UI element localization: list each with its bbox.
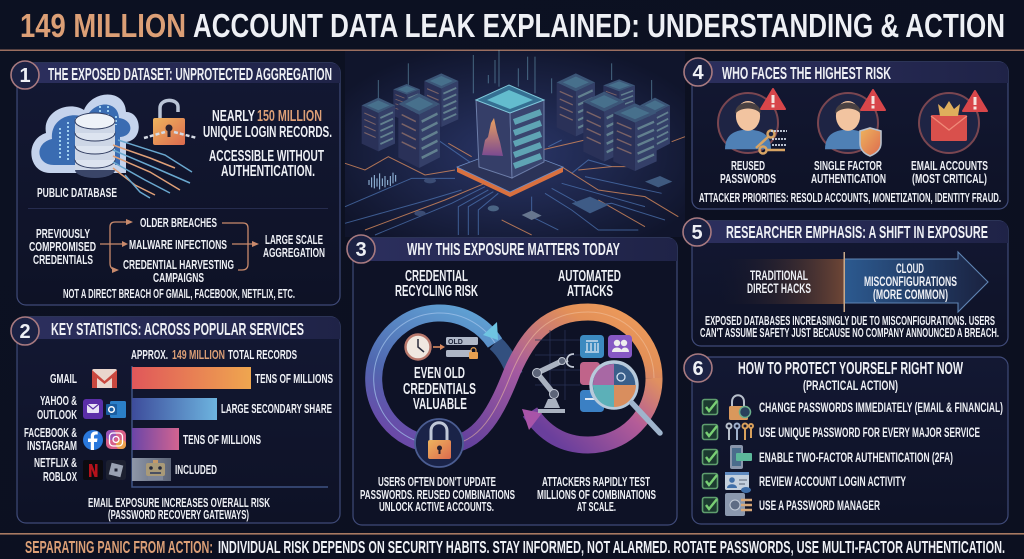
diagram: shift arrow: DIRECT HACKS (747, 281, 811, 296)
number badge 4 (684, 58, 712, 86)
note: misconfigurations (700, 314, 999, 340)
flow: credentials to aggregation: CREDENTIALS (33, 252, 93, 267)
text: attackers test at scale (537, 474, 656, 514)
diagram: shift arrow: MISCONFIGURATIONS (864, 274, 957, 289)
number badge 6 (684, 354, 712, 382)
panel 1: the exposed dataset (11, 61, 340, 305)
text: reused combinations (360, 474, 515, 514)
icon: robot arm and app tiles (532, 330, 660, 433)
flow: credentials to aggregation: LARGE SCALE (265, 232, 323, 247)
title: 149 MILLION (20, 7, 186, 44)
flow: credentials to aggregation: CREDENTIAL HARVESTING (123, 257, 234, 272)
bar chart: TENS OF MILLIONS (183, 432, 261, 447)
footer banner (0, 533, 1024, 557)
flow: credentials to aggregation: AGGREGATION (263, 245, 325, 260)
text: reused combinations: USERS OFTEN DON'T UPDATE (378, 474, 496, 489)
text: even old credentials valuable: CREDENTIALS (403, 381, 476, 398)
subheading: credential recycling: CREDENTIAL (405, 268, 468, 285)
service labels: ROBLOX (43, 469, 77, 484)
chart caption: 149 MILLION (172, 347, 225, 362)
text: even old credentials valuable: EVEN OLD (414, 365, 465, 382)
service labels: GMAIL (50, 371, 77, 386)
flow: credentials to aggregation: MALWARE INFECTIONS (129, 237, 227, 252)
illustration: server farm (345, 50, 685, 237)
labels: risk groups: PASSWORDS (720, 171, 776, 186)
diagram: shift arrow: (MORE COMMON) (873, 287, 948, 302)
panel 4 heading: WHO FACES THE HIGHEST RISK (722, 63, 891, 83)
action: password manager: USE A PASSWORD MANAGER (759, 498, 880, 513)
panel 6 heading: (PRACTICAL ACTION) (803, 378, 898, 393)
subheading: automated attacks: AUTOMATED (558, 268, 621, 285)
action: review login activity (702, 472, 906, 493)
service labels (24, 371, 77, 484)
labels: risk groups: AUTHENTICATION (811, 171, 886, 186)
callout: record count: ACCESSIBLE WITHOUT (209, 148, 324, 165)
panel 3: why this exposure matters (347, 235, 677, 525)
number badge 2 (11, 317, 39, 345)
labels: risk groups: (MOST CRITICAL) (912, 171, 987, 186)
number badge 1: 1 (19, 65, 31, 87)
flow: credentials to aggregation: CAMPAIGNS (153, 270, 204, 285)
labels: risk groups (720, 158, 988, 186)
text: even old credentials valuable: VALUABLE (413, 396, 467, 413)
number badge 6: 6 (692, 358, 704, 380)
icon: reused passwords (718, 89, 787, 154)
icon: robot (146, 460, 165, 480)
icon: facebook (83, 430, 103, 450)
icon: roblox (106, 460, 126, 480)
panel 1 heading: THE EXPOSED DATASET: UNPROTECTED AGGREGATION (48, 64, 332, 84)
panel 2: key statistics (11, 317, 340, 523)
bar chart: LARGE SECONDARY SHARE (221, 401, 332, 416)
panel 6 heading (738, 358, 963, 393)
subheading: automated attacks: ATTACKS (567, 283, 613, 300)
callout: record count: UNIQUE LOGIN RECORDS. (203, 124, 332, 141)
number badge 1 (11, 61, 39, 89)
note: email exposure: (PASSWORD RECOVERY GATEWAYS) (108, 507, 249, 522)
number badge 3 (347, 235, 375, 263)
number badge 5: 5 (691, 222, 703, 244)
flow: credentials to aggregation: PREVIOUSLY (36, 226, 90, 241)
panel 2 header (17, 317, 340, 339)
text: attackers test at scale: AT SCALE. (577, 499, 616, 514)
text: reused combinations: PASSWORDS. REUSED COMBINATIONS (360, 487, 515, 502)
diagram: infinity loop (374, 312, 654, 445)
number badge 2: 2 (19, 321, 31, 343)
action: review login activity: REVIEW ACCOUNT LOGIN ACTIVITY (759, 474, 906, 489)
subheading: automated attacks (558, 268, 621, 300)
subheading: credential recycling (395, 268, 478, 300)
panel 2 heading: KEY STATISTICS: ACROSS POPULAR SERVICES (51, 319, 304, 339)
flow: credentials to aggregation: OLDER BREACHES (140, 215, 217, 230)
panel 5: researcher emphasis (683, 218, 1008, 346)
flow: credentials to aggregation: COMPROMISED (29, 239, 96, 254)
bar chart (132, 366, 333, 487)
diagram: shift arrow: CLOUD (896, 261, 924, 276)
number badge 3: 3 (355, 239, 367, 261)
callout: record count: 150 MILLION (257, 108, 322, 125)
footer banner: SEPARATING PANIC FROM ACTION: (25, 537, 213, 557)
action: unique passwords (702, 424, 980, 440)
panel 3 heading: WHY THIS EXPOSURE MATTERS TODAY (407, 239, 620, 259)
chart caption (131, 347, 297, 362)
note: not a direct breach: NOT A DIRECT BREACH OF GMAIL, FACEBOOK, NETFLIX, ETC. (63, 287, 295, 301)
callout: record count: NEARLY (212, 108, 255, 125)
panel 4 header (692, 62, 1008, 83)
labels: risk groups: SINGLE FACTOR (814, 158, 882, 173)
text: even old credentials valuable (403, 365, 476, 413)
note: email exposure: EMAIL EXPOSURE INCREASES OVERALL RISK (88, 495, 270, 510)
number badge 4: 4 (692, 62, 704, 84)
icon: yahoo mail (83, 399, 103, 419)
bar chart: TENS OF MILLIONS (255, 371, 333, 386)
action: password manager (702, 493, 880, 516)
note: email exposure (88, 495, 270, 522)
callout: record count: AUTHENTICATION. (221, 163, 315, 180)
panel 5 header (692, 221, 1008, 243)
label: public database: PUBLIC DATABASE (37, 185, 117, 200)
icon: clock and old password (406, 334, 478, 360)
text: reused combinations: UNLOCK ACTIVE ACCOUNTS. (379, 499, 494, 514)
icon: broken padlock (144, 100, 197, 145)
panel 4: who faces the highest risk (684, 58, 1008, 209)
service labels: OUTLOOK (37, 407, 77, 422)
bar chart: INCLUDED (175, 462, 217, 477)
icon: email accounts (919, 91, 987, 153)
panel 6: how to protect yourself (684, 354, 1008, 524)
subheading: credential recycling: RECYCLING RISK (395, 283, 478, 300)
icon: outlook (106, 401, 126, 418)
icon: padlock (415, 419, 463, 467)
flow: credentials to aggregation (29, 215, 325, 285)
icon: cloud database (31, 94, 139, 178)
text: attackers test at scale: ATTACKERS RAPIDLY TEST (542, 474, 650, 489)
service labels: FACEBOOK & (24, 425, 77, 440)
callout: record count (203, 108, 332, 180)
icon: single factor authentication (818, 90, 885, 156)
icon: clock and old password: OLD (448, 339, 463, 346)
icon: netflix (83, 460, 103, 480)
main server (457, 85, 563, 197)
panel 3 header (353, 238, 677, 261)
icon: data streams (113, 140, 192, 198)
panel 1 header (17, 63, 340, 83)
diagram: shift arrow (713, 252, 988, 312)
labels: risk groups: REUSED (731, 158, 765, 173)
icon: gmail (92, 369, 117, 388)
action: two-factor authentication (702, 445, 953, 469)
action: change passwords (702, 395, 1003, 420)
chart caption: TOTAL RECORDS (228, 347, 297, 362)
service labels: INSTAGRAM (27, 438, 77, 453)
text: attackers test at scale: MILLIONS OF COMBINATIONS (537, 487, 656, 502)
chart caption: APPROX. (131, 347, 168, 362)
number badge 5 (683, 218, 711, 246)
diagram: shift arrow: TRADITIONAL (750, 268, 808, 283)
service labels: YAHOO & (40, 393, 77, 408)
icon: instagram (106, 430, 126, 449)
service labels: NETFLIX & (34, 455, 77, 470)
